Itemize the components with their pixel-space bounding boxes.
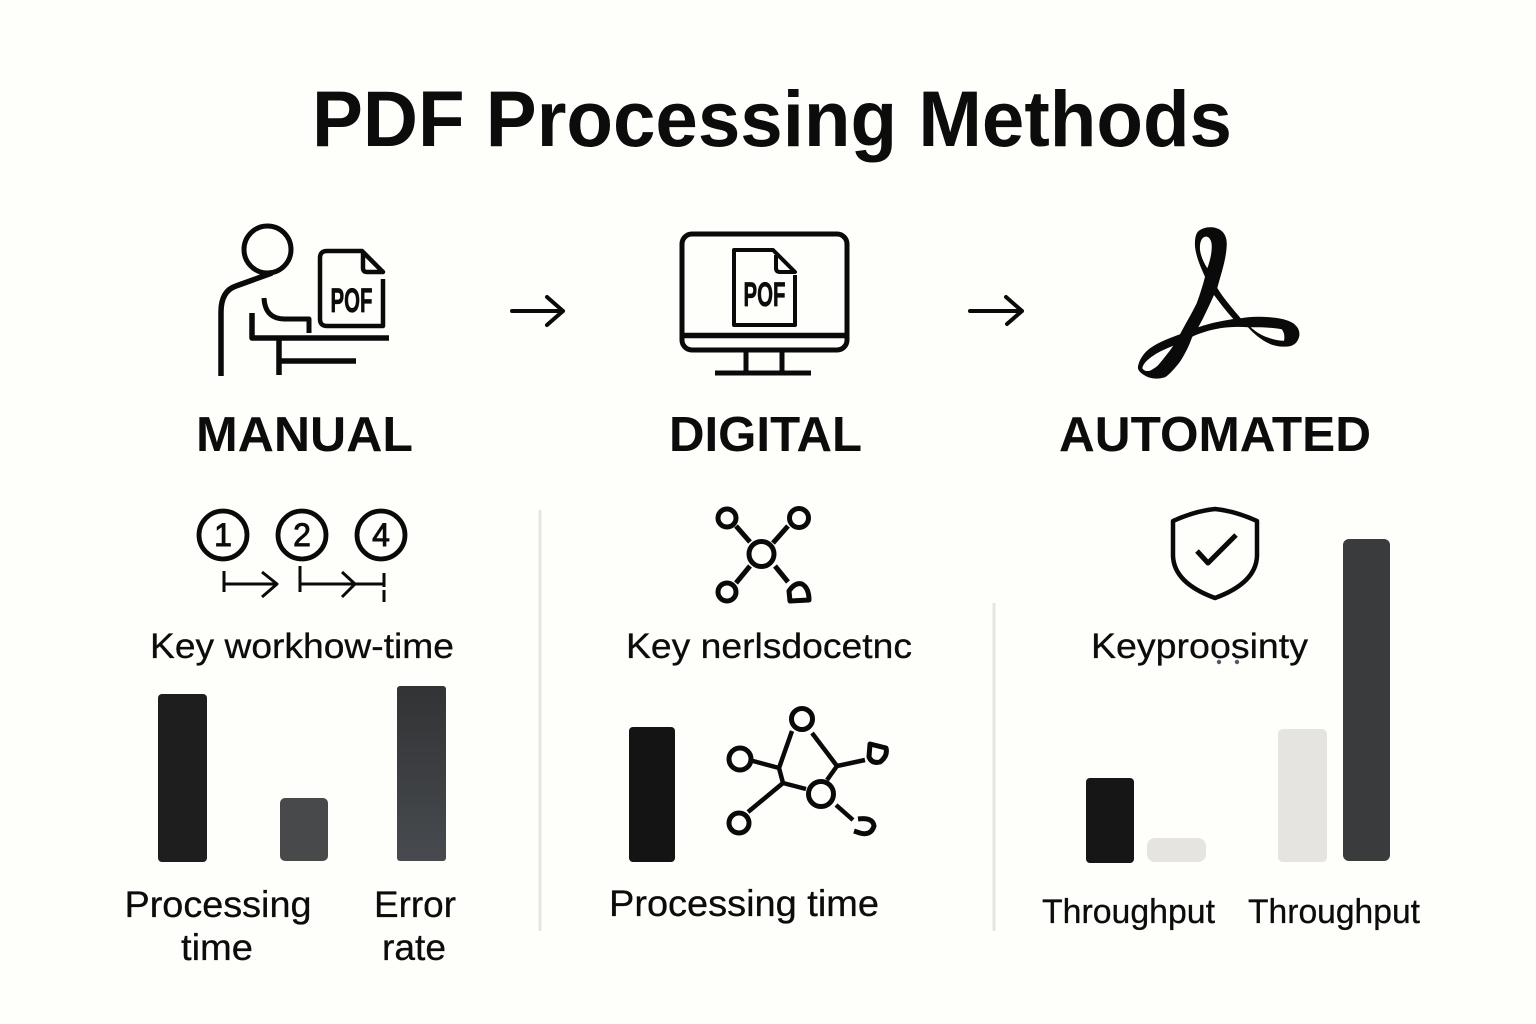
- panel: manual method: [124, 226, 456, 968]
- heading: manual: MANUAL: [196, 408, 413, 462]
- icon: person at desk with PDF: [221, 226, 389, 376]
- icon: acrobat logo: [1138, 227, 1299, 379]
- label: processing time: Processing time: [609, 883, 879, 924]
- icon: network hub: [718, 508, 809, 601]
- label: throughput 2: Throughput: [1248, 893, 1421, 931]
- icon: numbered workflow steps: [199, 511, 405, 602]
- bar chart: automated: [1086, 539, 1390, 863]
- title: PDF Processing Methods: [312, 74, 1232, 163]
- panel: digital method: [609, 234, 912, 924]
- icon: numbered workflow steps: 2: [293, 517, 311, 553]
- text: key digital: Key nerlsdocetnc: [626, 627, 912, 666]
- heading: automated: AUTOMATED: [1059, 408, 1371, 462]
- icon: network graph: [729, 708, 886, 834]
- icon: shield with check: [1173, 509, 1257, 598]
- bar: digital: [629, 727, 675, 862]
- panel: automated method: [1042, 227, 1421, 931]
- heading: digital: DIGITAL: [669, 408, 862, 462]
- artifact dots under text: [1217, 660, 1239, 664]
- icon: numbered workflow steps: 1: [214, 517, 232, 553]
- icon: numbered workflow steps: 4: [372, 517, 390, 553]
- icon: monitor with PDF: POF: [744, 276, 786, 314]
- label: rate: rate: [382, 927, 446, 968]
- bar chart: manual: [158, 686, 446, 862]
- icon: monitor with PDF: [682, 234, 847, 373]
- icon: person at desk with PDF: POF: [330, 282, 372, 320]
- label: processing time: Processing: [124, 884, 312, 925]
- text: key workflow time: Key workhow-time: [150, 627, 454, 666]
- text: key automated: Keyproosinty: [1091, 627, 1309, 666]
- arrow: manual to digital: [512, 297, 563, 325]
- label: time: time: [181, 927, 253, 968]
- label: error: Error: [374, 884, 456, 925]
- arrow: digital to automated: [970, 297, 1022, 324]
- label: throughput 1: Throughput: [1042, 893, 1216, 931]
